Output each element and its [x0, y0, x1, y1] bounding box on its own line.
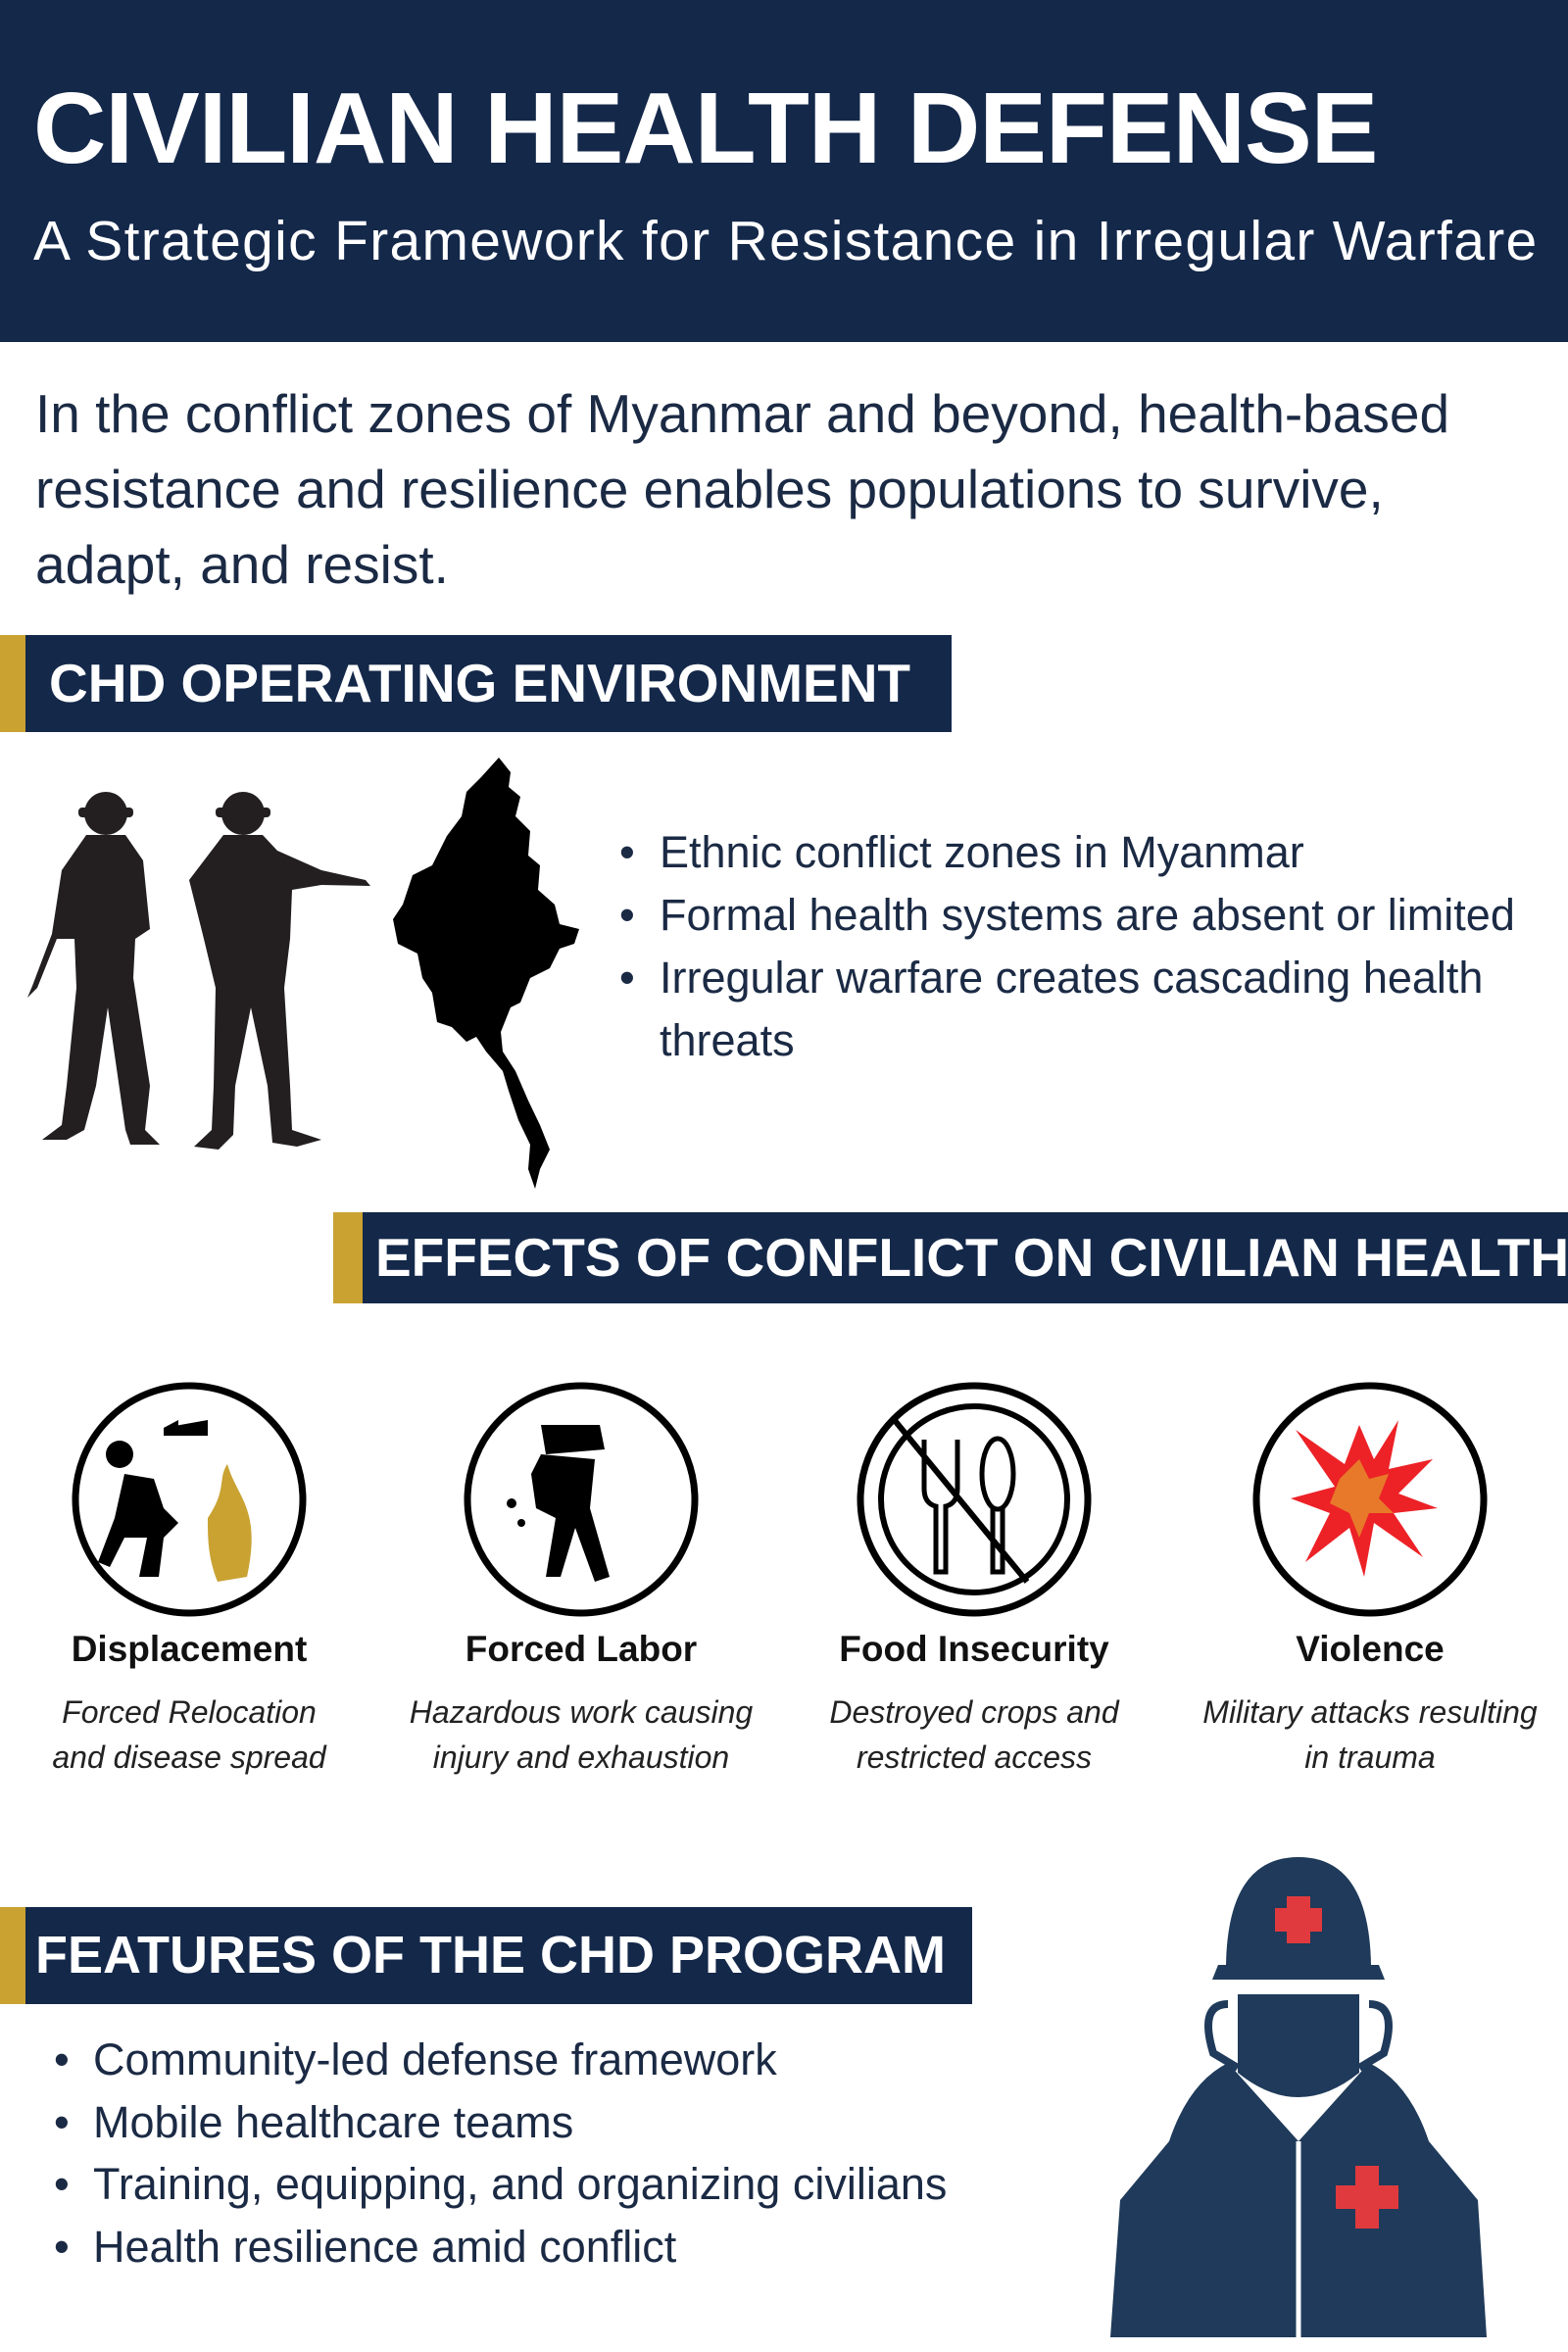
icon: violence	[1252, 1382, 1488, 1617]
bullets: operating environment: •	[619, 827, 635, 877]
bullets: features: Health resilience amid conflict	[93, 2221, 676, 2272]
intro text: In the conflict zones of Myanmar and beyond, health-based resistance and resilience enables populations to survive, adapt, and resist.	[35, 383, 1449, 595]
label: food insecurity: restricted access	[857, 1740, 1092, 1775]
label: violence: Military attacks resulting	[1202, 1694, 1538, 1730]
label: displacement: Displacement	[72, 1629, 307, 1669]
section heading: effects: EFFECTS OF CONFLICT ON CIVILIAN HEALTH	[375, 1227, 1568, 1288]
bullets: operating environment: •	[619, 953, 635, 1003]
icon: forced labor	[465, 1382, 698, 1617]
label: violence: Violence	[1296, 1629, 1445, 1669]
subtitle: A Strategic Framework for Resistance in Irregular Warfare	[33, 210, 1538, 272]
section heading: operating environment: CHD OPERATING ENVIRONMENT	[49, 653, 910, 713]
icon: displacement	[73, 1382, 306, 1617]
section heading: operating environment	[0, 635, 952, 732]
bullets: operating environment: threats	[660, 1015, 795, 1065]
section heading: features	[0, 1907, 972, 2004]
label: forced labor: injury and exhaustion	[433, 1740, 729, 1775]
bullets: operating environment: Formal health systems are absent or limited	[660, 890, 1515, 940]
bullets: features: Training, equipping, and organizing civilians	[93, 2159, 947, 2209]
label: displacement: Forced Relocation	[62, 1694, 317, 1730]
bullets: features: •	[54, 2221, 70, 2272]
label: displacement	[52, 1629, 327, 1775]
bullets: operating environment: •	[619, 890, 635, 940]
label: violence	[1202, 1629, 1538, 1775]
label: forced labor: Forced Labor	[466, 1629, 697, 1669]
header banner	[0, 0, 1568, 342]
bullets: features: •	[54, 2097, 70, 2146]
label: food insecurity: Food Insecurity	[839, 1629, 1109, 1669]
section heading: effects	[333, 1212, 1568, 1303]
label: displacement: and disease spread	[52, 1740, 326, 1775]
bullets: operating environment: Irregular warfare creates cascading health	[660, 953, 1483, 1003]
bullets: features: •	[54, 2159, 70, 2209]
label: forced labor: Hazardous work causing	[410, 1694, 753, 1730]
icon: map of Myanmar	[393, 758, 579, 1189]
icon: soldiers	[27, 792, 370, 1150]
bullets: features	[54, 2034, 947, 2272]
icon: food insecurity	[857, 1382, 1092, 1617]
bullets: features: Mobile healthcare teams	[93, 2097, 573, 2146]
label: violence: in trauma	[1304, 1740, 1436, 1775]
title: CIVILIAN HEALTH DEFENSE	[33, 72, 1377, 184]
label: food insecurity: Destroyed crops and	[829, 1694, 1119, 1730]
section heading: features: FEATURES OF THE CHD PROGRAM	[35, 1926, 946, 1984]
bullets: features: Community-led defense framework	[93, 2034, 777, 2084]
icon: medic	[1110, 1857, 1487, 2337]
bullets: features: •	[54, 2034, 70, 2084]
bullets: operating environment: Ethnic conflict zones in Myanmar	[660, 827, 1304, 877]
bullets: operating environment	[619, 827, 1515, 1065]
label: food insecurity	[829, 1629, 1119, 1775]
label: forced labor	[410, 1629, 753, 1775]
